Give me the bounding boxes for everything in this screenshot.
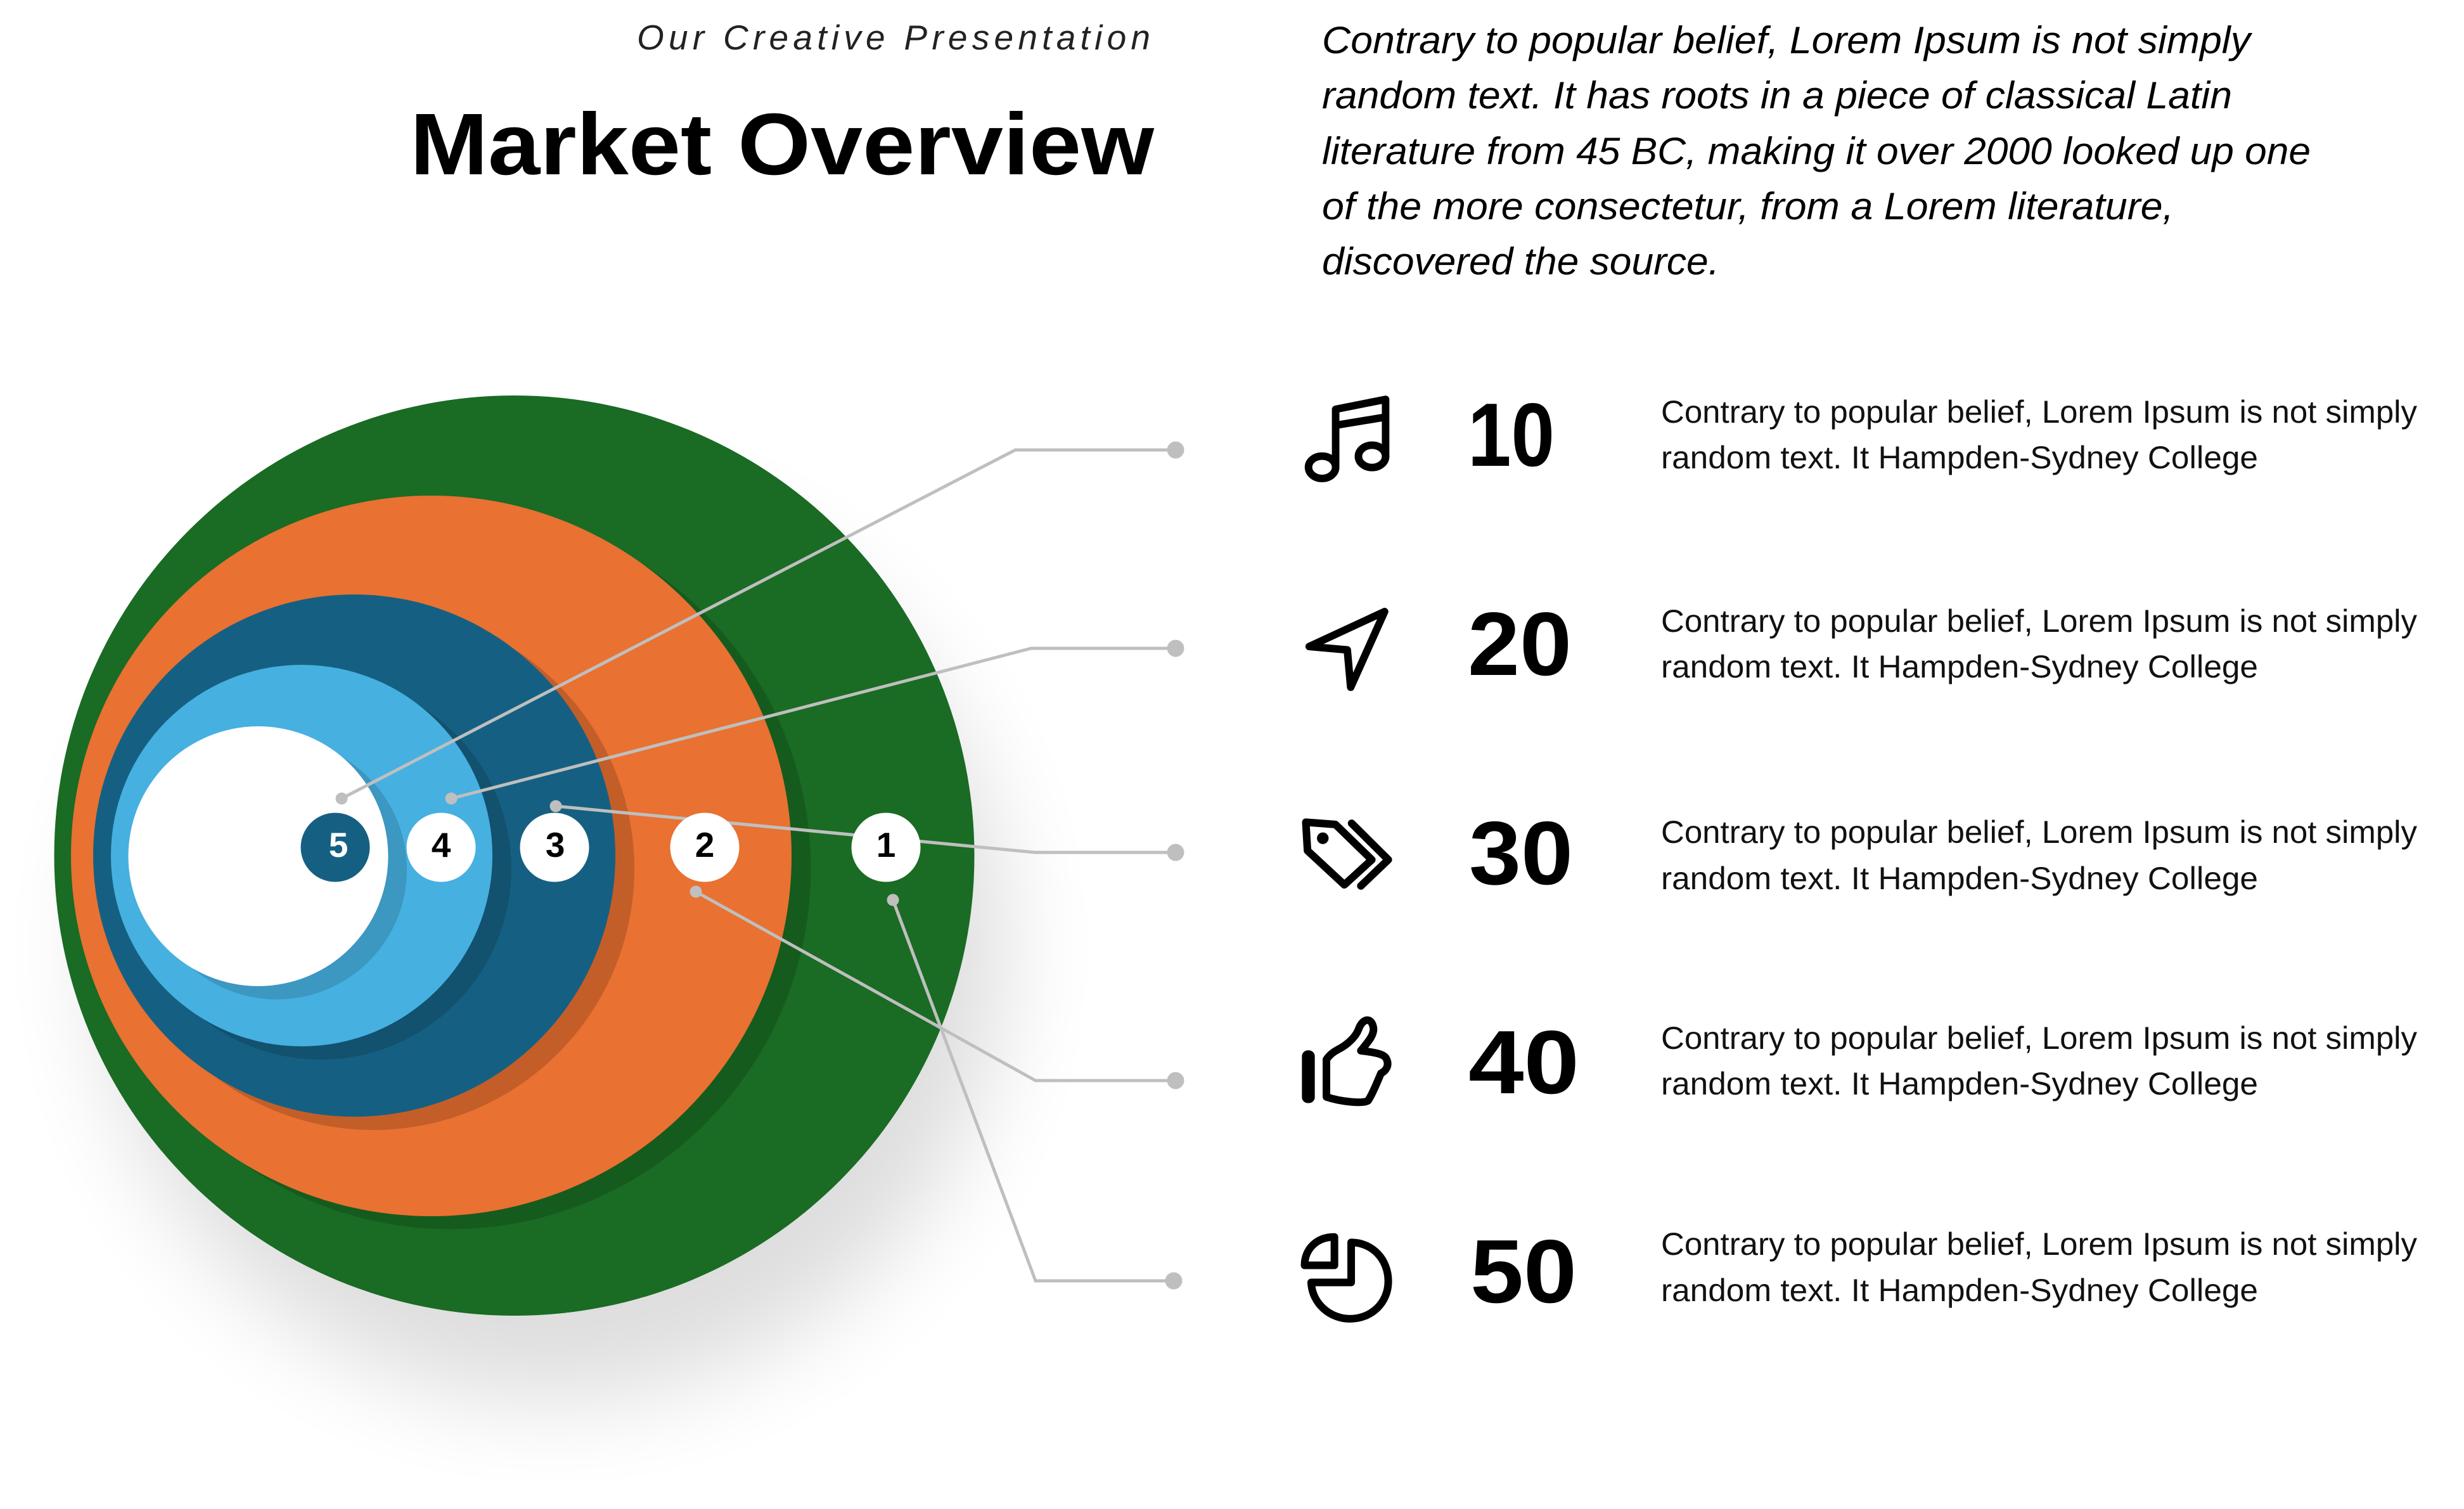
icon: price tags bbox=[1306, 822, 1389, 886]
description 2: Contrary to popular belief, Lorem Ipsum is not simply bbox=[1661, 603, 2417, 639]
badge 5 bbox=[300, 812, 370, 882]
icon: thumbs up bbox=[1302, 1020, 1388, 1103]
value 50: 50 bbox=[1470, 1221, 1577, 1322]
description 2 bbox=[1661, 603, 2417, 684]
badge 1 bbox=[852, 812, 920, 882]
number badges bbox=[300, 812, 920, 882]
description 2: random text. It Hampden-Sydney College bbox=[1661, 649, 2258, 684]
badge 1: 1 bbox=[876, 825, 895, 864]
value 30: 30 bbox=[1469, 803, 1573, 904]
nested circle diagram bbox=[55, 395, 1004, 1401]
description 1 bbox=[1661, 394, 2417, 475]
title: Market Overview bbox=[410, 96, 1155, 193]
intro paragraph: random text. It has roots in a piece of classical Latin bbox=[1322, 74, 2232, 117]
badge 3: 3 bbox=[546, 825, 565, 864]
title block bbox=[410, 18, 1155, 193]
connector dots bbox=[336, 441, 1184, 1289]
description 1: Contrary to popular belief, Lorem Ipsum is not simply bbox=[1661, 394, 2417, 430]
description 3: random text. It Hampden-Sydney College bbox=[1661, 861, 2258, 896]
intro paragraph: discovered the source. bbox=[1322, 240, 1719, 283]
description 4: random text. It Hampden-Sydney College bbox=[1661, 1066, 2258, 1101]
intro paragraph: literature from 45 BC, making it over 2000 looked up one bbox=[1322, 130, 2311, 172]
value 10: 10 bbox=[1468, 385, 1555, 485]
subtitle: Our Creative Presentation bbox=[637, 18, 1150, 57]
badge 4: 4 bbox=[432, 825, 451, 864]
row values bbox=[1468, 385, 1579, 1322]
badge 3 bbox=[520, 812, 589, 882]
value 20: 20 bbox=[1468, 594, 1572, 695]
description 5 bbox=[1661, 1226, 2417, 1308]
icon: music notes bbox=[1309, 399, 1385, 478]
intro paragraph: of the more consectetur, from a Lorem literature, bbox=[1322, 185, 2174, 228]
connector lines bbox=[342, 450, 1176, 1281]
intro paragraph: Contrary to popular belief, Lorem Ipsum is not simply bbox=[1322, 19, 2253, 61]
badge 5: 5 bbox=[329, 825, 348, 864]
icon: navigation arrow bbox=[1309, 612, 1385, 687]
description 4: Contrary to popular belief, Lorem Ipsum is not simply bbox=[1661, 1020, 2417, 1056]
circle 3: dark blue bbox=[93, 594, 634, 1130]
description 4 bbox=[1661, 1020, 2417, 1101]
drop shadow bbox=[98, 494, 1004, 1401]
description 5: Contrary to popular belief, Lorem Ipsum is not simply bbox=[1661, 1226, 2417, 1262]
circle 4: light blue bbox=[111, 665, 511, 1060]
badge 2: 2 bbox=[695, 825, 714, 864]
intro paragraph bbox=[1322, 19, 2311, 283]
description 3 bbox=[1661, 814, 2417, 896]
circle 5: white bbox=[128, 726, 407, 999]
circle 2: orange bbox=[71, 496, 811, 1230]
row descriptions bbox=[1661, 394, 2417, 1308]
description 3: Contrary to popular belief, Lorem Ipsum is not simply bbox=[1661, 814, 2417, 850]
icon: pie chart bbox=[1305, 1237, 1389, 1319]
circle 1: green bbox=[55, 395, 975, 1316]
value 40: 40 bbox=[1468, 1012, 1579, 1113]
description 1: random text. It Hampden-Sydney College bbox=[1661, 440, 2258, 475]
description 5: random text. It Hampden-Sydney College bbox=[1661, 1273, 2258, 1308]
badge 4 bbox=[407, 812, 475, 882]
badge 2 bbox=[671, 812, 739, 882]
